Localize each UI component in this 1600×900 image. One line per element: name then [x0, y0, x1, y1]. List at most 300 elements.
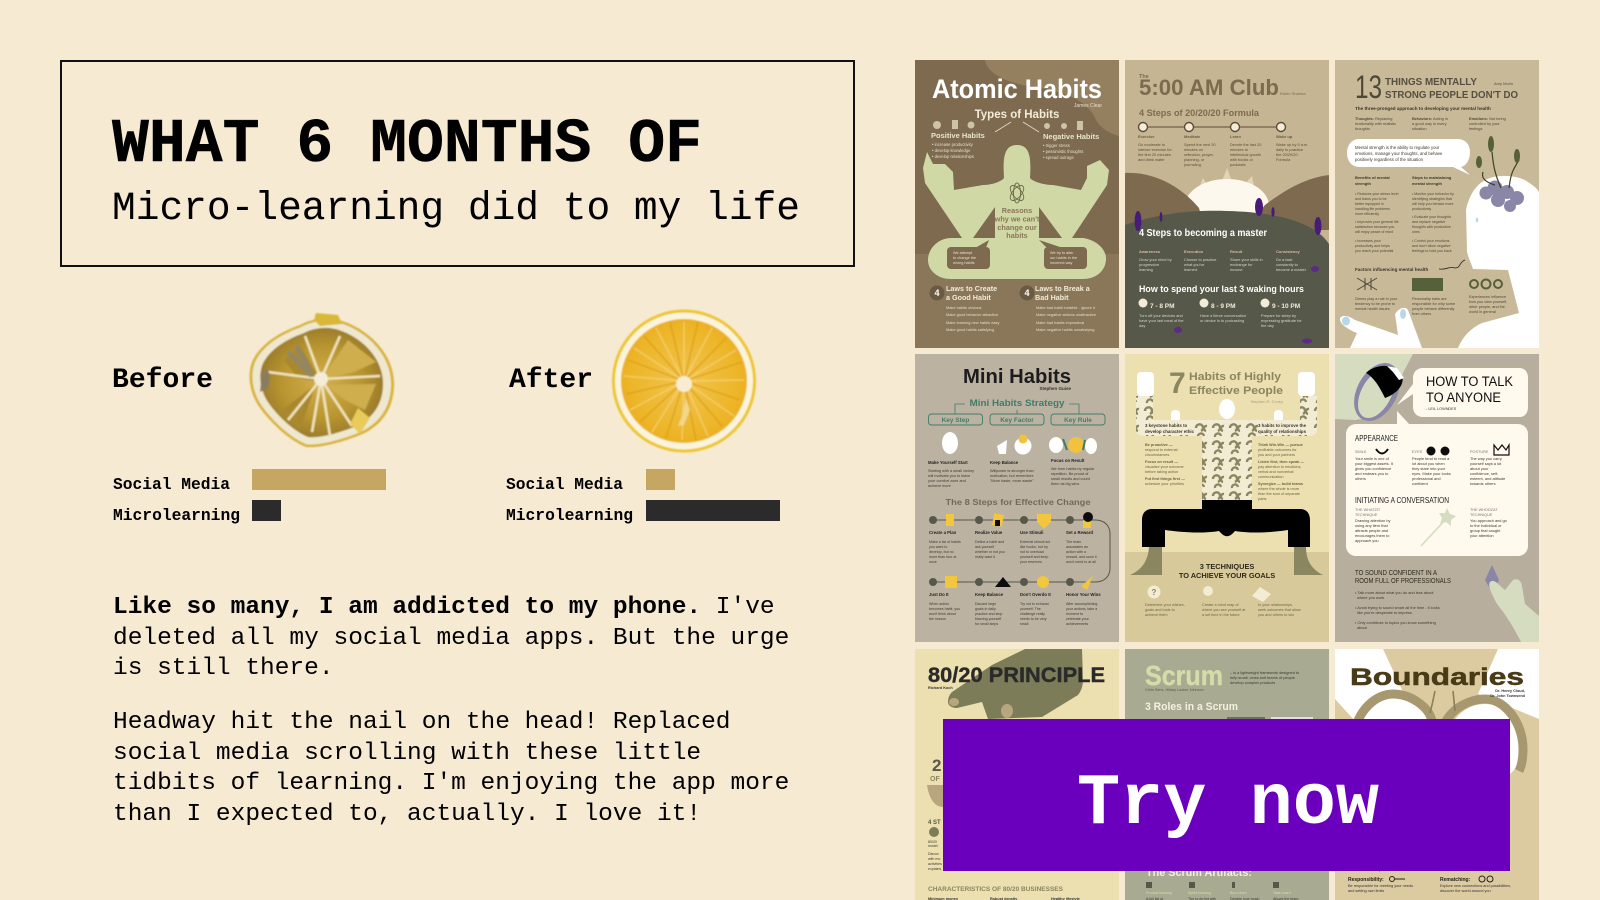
panel: book summary: Mini Habits: you want to [929, 545, 947, 549]
panel: book summary: Mini Habits: Key Step [942, 417, 969, 424]
panel: book summary: Mini Habits: Realize Value [975, 530, 1003, 535]
talking mouth icon [1345, 355, 1409, 429]
panel: book summary: Scrum: help small, close-knit teams of people [1230, 675, 1295, 680]
panel: book summary: 13 Things: thoughts [1355, 126, 1370, 131]
panel: book summary: Mini Habits: ask yourself [975, 545, 994, 549]
panel: book summary: 7 Habits: where you see yourself at [1202, 608, 1246, 612]
panel: book summary: How to Talk to Anyone [1335, 354, 1539, 642]
panel: book summary: 7 Habits: Stephen R. Covey [1251, 399, 1283, 404]
panel: book summary: 5 AM Club [1125, 60, 1329, 348]
before label: Before [112, 365, 213, 396]
panel: book summary: Scrum: The Scrum Artifacts: [1146, 867, 1252, 879]
panel: book summary: Mini Habits: for small steps [975, 622, 998, 626]
panel: book summary: 5 AM Club: what you've [1184, 262, 1204, 267]
panel: book summary: 13 Things: strength [1355, 181, 1372, 186]
panel: book summary: Atomic Habits: our habits in the [1050, 256, 1077, 260]
headline: WHAT 6 MONTHS OF [112, 109, 702, 180]
first paragraph: deleted all my social media apps. But the urge [113, 625, 789, 652]
panel: book summary: How to Talk to Anyone: TECHNIQUE [1355, 513, 1378, 517]
panel: book summary: How to Talk to Anyone: esteem, and attitude [1470, 476, 1505, 481]
panel: book summary: 5 AM Club: 4 Steps of 20/20/20 Formula [1139, 108, 1260, 118]
panel: book summary: Mini Habits: them as big wins [1051, 482, 1079, 486]
panel: book summary: 7 Habits: In your relationships, [1258, 603, 1293, 607]
panel: book summary: Mini Habits: Stephen Guise [1039, 386, 1071, 391]
panel: book summary: How to Talk to Anyone: yourself says a lot [1470, 461, 1502, 466]
panel: book summary: 13 Things: emotions, manage your thoughts, and behave [1355, 151, 1443, 156]
sunrise hills [1199, 168, 1255, 190]
panel: book summary: 13 Things: irrationality with realistic [1355, 121, 1396, 126]
panel: book summary: 13 Things: other people, and the [1469, 305, 1505, 309]
panel: book summary: 80/20 Principle: 2 [932, 756, 941, 775]
panel: book summary: Atomic Habits: Make habits obvious [946, 305, 982, 310]
panel: book summary: 7 Habits: visualize your outcome [1145, 465, 1184, 469]
panel: book summary: 7 Habits: Put first things first — [1145, 477, 1185, 481]
panel: book summary: Scrum: 3 Roles in a Scrum [1145, 701, 1238, 713]
panel: book summary: 5 AM Club: Wake up by 5 a.m. [1276, 142, 1308, 147]
panel: book summary: Mini Habits: External stimuli act [1020, 540, 1050, 544]
panel: book summary: Mini Habits: Don't Overdo It [1020, 592, 1051, 597]
panel: book summary: Mini Habits: The 8 Steps for Effective Change [946, 497, 1091, 507]
panel: book summary: 5 AM Club: Share your skills in [1230, 257, 1263, 262]
panel: book summary: Atomic Habits: Reasons [1002, 206, 1032, 215]
panel: book summary: 7 Habits: Determine your wishes, [1145, 603, 1185, 607]
panel: book summary: Boundaries: and setting own limits [1348, 889, 1384, 893]
panel: book summary: 5 AM Club: and drink water [1138, 157, 1165, 162]
panel: book summary: Mini Habits: moment to [1066, 612, 1083, 616]
panel: book summary: Atomic Habits: • pessimistic thoughts [1043, 149, 1083, 154]
panel: book summary: 80/20 Principle: Discov [928, 852, 939, 856]
panel: book summary: 5 AM Club: journaling [1183, 162, 1201, 167]
panel: book summary: 5 AM Club: minutes to [1230, 147, 1248, 152]
panel: book summary: How to Talk to Anyone: lot about you when [1412, 461, 1445, 466]
panel: book summary: How to Talk to Anyone: • Avoid trying to sound smart all the time - it looks [1355, 605, 1440, 610]
legend label: social media before: Social Media [113, 475, 230, 494]
panel: book summary: Scrum: develop complex products [1230, 680, 1275, 685]
panel: book summary: 80/20 Principle: 80/20 PRINCIPLE [928, 664, 1105, 687]
panel: book summary: 5 AM Club: How to spend your last 3 waking hours [1139, 284, 1304, 294]
panel: book summary: 13 Things: and replace negative [1412, 220, 1445, 224]
panel: book summary: 7 Habits: 3 habits to improve the [1258, 423, 1307, 428]
panel: book summary: 7 Habits: you and your partners [1258, 453, 1295, 457]
speech bubble [1347, 139, 1470, 175]
panel: book summary: 13 Things: better equipped in [1355, 202, 1384, 206]
panel: book summary: 13 Things [1335, 60, 1539, 348]
panel: book summary: How to Talk to Anyone: TECHNIQUE [1470, 513, 1493, 517]
figure [923, 145, 1109, 279]
panel: book summary: 13 Things: positively regardless of the situation [1355, 157, 1424, 162]
panel: book summary: 13 Things: responsible for why some [1412, 302, 1455, 306]
panel: book summary: 5 AM Club: the first 20 minutes [1138, 152, 1171, 157]
panel: book summary: 5 AM Club: the 20/20/20 [1276, 152, 1298, 157]
panel: book summary: 80/20 Principle: 4 ST [928, 820, 941, 826]
panel: book summary: 7 Habits: Synergize — build teams [1258, 482, 1303, 486]
panel: book summary: 13 Things: 13 [1355, 69, 1382, 105]
panel: book summary: Mini Habits: Willpower is stronger than [990, 469, 1034, 473]
panel: book summary: Atomic Habits: Negative Habits [1043, 132, 1099, 141]
panel: book summary: 5 AM Club: learned [1184, 267, 1197, 272]
panel: book summary: 5 AM Club: Have a fierce conversation [1200, 313, 1246, 318]
panel: book summary: Atomic Habits: a Good Habit [946, 293, 991, 302]
panel: book summary: Mini Habits: Keep Balance [990, 460, 1019, 465]
panel: book summary: 5 AM Club: daily to practice [1276, 147, 1303, 152]
legend label: microlearning before: Microlearning [113, 506, 240, 525]
panel: book summary: Mini Habits: Discard large [975, 602, 996, 606]
panel: book summary: 5 AM Club: planning, or [1184, 157, 1205, 162]
panel: book summary: 80/20 Principle: with mo [928, 857, 940, 861]
panel: book summary: 5 AM Club: reflection, prayer, [1184, 152, 1214, 157]
panel: book summary: 5 AM Club: Devote the last 20 [1230, 142, 1262, 147]
panel: book summary: 5 AM Club: Execution [1184, 249, 1204, 254]
panel: book summary: 5 AM Club: Meditate [1184, 134, 1201, 139]
panel: book summary: Boundaries [1335, 649, 1539, 900]
panel: book summary: 13 Things: mental strength [1412, 181, 1443, 186]
panel: book summary: Atomic Habits: • develop knowledge [932, 148, 971, 153]
panel: book summary: 7 Habits: profitable outcomes for [1258, 448, 1297, 452]
panel: book summary: Mini Habits: We form habits by regular [1051, 467, 1095, 471]
panel: book summary: Boundaries: Responsibility: [1348, 877, 1384, 883]
panel: book summary: 7 Habits: a set time in the future [1202, 613, 1240, 617]
panel: book summary: 13 Things: controlled by your [1469, 121, 1500, 126]
panel: book summary: Mini Habits: once [929, 560, 937, 564]
steps path [933, 520, 1110, 582]
first paragraph: Like so many, I am addicted to my phone. I've [113, 594, 775, 621]
panel: book summary: 13 Things: thoughts with productive [1412, 225, 1451, 229]
panel: book summary: Mini Habits: Key Rule [1064, 417, 1092, 424]
panel: book summary: Atomic Habits: change our [997, 223, 1037, 232]
panel: book summary: Mini Habits: Mini Habits Strategy [970, 398, 1065, 409]
panel: book summary: 13 Things: situation [1412, 126, 1426, 131]
panel: book summary: Mini Habits: blaming yourself [975, 617, 1001, 621]
panel: book summary: 13 Things: handling life problems [1355, 207, 1390, 211]
panel: book summary: 7 Habits: develop character ethic [1145, 429, 1195, 434]
panel: book summary: Atomic Habits: Types of Habits [975, 109, 1059, 121]
panel: book summary: 5 AM Club: with books or [1230, 157, 1254, 162]
panel: book summary: Boundaries: Boundaries [1350, 664, 1524, 691]
panel: book summary: How to Talk to Anyone: about your [1470, 466, 1489, 471]
panel: book summary: 13 Things: a good way in every [1412, 121, 1447, 126]
panel: book summary: Scrum [1125, 649, 1329, 900]
panel: book summary: How to Talk to Anyone: Drawing attention by [1355, 518, 1391, 523]
panel: book summary: Boundaries: Dr. Henry Cloud, [1495, 689, 1525, 693]
bar: social media before [252, 469, 386, 490]
panel: book summary: How to Talk to Anyone: - LEIL LOWNDES [1426, 407, 1457, 411]
panel: book summary: Mini Habits: action with a [1066, 550, 1086, 554]
panel: book summary: 5 AM Club: learning [1139, 267, 1153, 272]
panel: book summary: How to Talk to Anyone: confidence, self- [1470, 471, 1499, 476]
panel: book summary: Atomic Habits: We attempt [953, 251, 973, 255]
panel: book summary: 80/20 Principle: CHARACTERISTICS OF 80/20 BUSINESSES [928, 886, 1064, 893]
panel: book summary: 5 AM Club: progressive [1139, 262, 1159, 267]
panel: book summary: Mini Habits: The brain [1066, 540, 1081, 544]
panel: book summary: Atomic Habits: Make learning new habits easy [946, 320, 999, 325]
panel: book summary: 7 Habits: communication [1258, 475, 1284, 479]
call to action button [943, 719, 1510, 871]
panel: book summary: How to Talk to Anyone: TO ANYONE [1426, 390, 1501, 405]
panel: book summary: Atomic Habits: Atomic Habits [932, 74, 1102, 104]
panel: book summary: 13 Things: tendency to be prone to [1355, 302, 1395, 306]
panel: book summary: How to Talk to Anyone: The way you carry [1470, 456, 1502, 461]
legend label: social media after: Social Media [506, 475, 623, 494]
panel: book summary: Mini Habits: challenge really [1020, 612, 1045, 616]
panel: book summary: 13 Things: • Improves your general life [1355, 220, 1399, 224]
panel: book summary: Mini Habits: "More haste, more waste" [990, 479, 1034, 483]
panel: book summary: 13 Things: feelings to hold you back [1412, 249, 1452, 253]
panel: book summary: Atomic Habits: • develop relationships [932, 154, 974, 159]
panel: book summary: 13 Things: how you view yourself, [1469, 300, 1507, 304]
panel: book summary: 13 Things: satisfaction because you [1355, 225, 1394, 229]
panel: book summary: How to Talk to Anyone: SMILE [1355, 450, 1367, 454]
panel: book summary: 13 Things: Mental strength is the ability to regulate your [1355, 145, 1440, 150]
panel: book summary: 7 Habits: respond to external [1145, 448, 1178, 452]
bar: social media after [646, 469, 675, 490]
second paragraph: tidbits of learning. I'm enjoying the app more [113, 770, 789, 797]
panel: book summary: How to Talk to Anyone: approach you [1355, 538, 1379, 543]
icon: fresh lemon [612, 310, 756, 452]
panel: book summary: Mini Habits: Keep Balance [975, 592, 1004, 597]
panel: book summary: 5 AM Club: 5:00 AM Club [1139, 75, 1279, 100]
panel: book summary: 13 Things: Thoughts: Replacing [1355, 116, 1392, 121]
panel: book summary: 13 Things: Personality traits are [1412, 297, 1447, 301]
panel: book summary: 80/20 Principle: model [928, 844, 938, 848]
panel: book summary: 13 Things: The three-pronged approach to developing your mental health [1355, 106, 1491, 111]
white content panel [1346, 424, 1528, 556]
panel: book summary: Boundaries: Dr. John Townsend [1490, 694, 1526, 698]
panel: book summary: 7 Habits: Effective People [1189, 385, 1283, 397]
panel: book summary: 13 Things: world in general [1469, 310, 1496, 314]
panel: book summary: Mini Habits: After accomplishing [1066, 602, 1097, 606]
panel: book summary: 5 AM Club: the day [1261, 323, 1274, 328]
panel: book summary: Mini Habits: needs to be very [1020, 617, 1047, 621]
panel: book summary: Atomic Habits: Make bad habits impractical [1036, 320, 1084, 325]
panel: book summary: 7 Habits: circumstances [1145, 453, 1169, 457]
panel: book summary: 7 Habits: parts [1258, 497, 1267, 501]
panel: book summary: 5 AM Club: have your last meal of the [1139, 318, 1184, 323]
panel: book summary: 5 AM Club: Exercise [1138, 134, 1155, 139]
panel: book summary: Mini Habits: the reason [929, 617, 946, 621]
panel: book summary: 5 AM Club: Grow your mind by [1139, 257, 1172, 262]
panel: book summary: 13 Things: • Control your emotions [1412, 239, 1450, 243]
panel: book summary: 13 Things: • Reduces your stress level [1355, 192, 1399, 196]
panel: book summary: Atomic Habits: Make negative actions unattractive [1036, 312, 1096, 317]
panel: book summary: 80/20 Principle: OF [930, 776, 940, 783]
panel: book summary: How to Talk to Anyone: INITIATING A CONVERSATION [1355, 496, 1449, 505]
panel: book summary: Mini Habits: Honor Your Wins [1066, 592, 1101, 597]
panel: book summary: Mini Habits: won't need to at all [1066, 560, 1096, 564]
panel: book summary: Atomic Habits: Laws to Create [946, 284, 997, 293]
atom icon [1008, 183, 1026, 203]
panel: book summary: Atomic Habits: Make negative habits unsatisfying [1036, 327, 1094, 332]
panel: book summary: Mini Habits: Starting with a small victory [928, 469, 974, 473]
after panel [506, 310, 780, 525]
panel: book summary: How to Talk to Anyone: where you work [1357, 595, 1384, 600]
panel: book summary: Boundaries: Explore new connections and possibilities, [1440, 884, 1511, 888]
panel: book summary: Mini Habits: Use Stimuli [1020, 530, 1043, 535]
panel: book summary: 7 Habits: 3 keystone habits to [1145, 423, 1188, 428]
panel: book summary: Mini Habits: Mini Habits [963, 366, 1071, 388]
panel: book summary: 5 AM Club: 9 - 10 PM [1272, 303, 1300, 310]
panel: book summary: Mini Habits: not to overload [1020, 550, 1044, 554]
patterned body [1136, 396, 1317, 502]
panel: book summary: How to Talk to Anyone: to the individual or [1470, 523, 1502, 528]
brain [1480, 180, 1524, 212]
panel: book summary: 7 Habits: before taking action [1145, 470, 1178, 474]
panel: book summary: How to Talk to Anyone: gives you confidence [1355, 466, 1391, 471]
panel: book summary: Atomic Habits: Laws to Break a [1035, 284, 1091, 293]
panel: book summary: Boundaries: discover the world around you [1440, 889, 1491, 893]
panel: book summary: How to Talk to Anyone: using any item that [1355, 523, 1389, 528]
panel: book summary: 5 AM Club: Go moderate to [1138, 142, 1165, 147]
panel: book summary: 7 Habits: schedule your priorities [1145, 482, 1184, 486]
panel: book summary: How to Talk to Anyone: You approach and go [1470, 518, 1507, 523]
panel: book summary: Mini Habits: Just Do It [929, 592, 949, 597]
panel: book summary: 5 AM Club: intellectual growth [1230, 152, 1261, 157]
panel: book summary: 5 AM Club: intense exercise for [1138, 147, 1172, 152]
panel: book summary: How to Talk to Anyone: HOW TO TALK [1426, 374, 1513, 389]
panel: book summary: 13 Things: and trains you to be [1355, 197, 1387, 201]
panel: book summary: 5 AM Club: Robin Sharma [1280, 91, 1306, 96]
panel: book summary: 13 Things: mental health issues [1355, 307, 1390, 311]
panel: book summary: 7 Habits: goals and tools to [1145, 608, 1175, 612]
panel: book summary: Boundaries: Rematching: [1440, 877, 1471, 883]
panel: book summary: How to Talk to Anyone: towards others [1470, 481, 1496, 486]
panel: book summary: Mini Habits: will motivate you to leave [928, 474, 970, 478]
panel: book summary: Atomic Habits: • trigger stress [1043, 143, 1070, 148]
panel: book summary: Mini Habits: Set a Reward [1066, 530, 1093, 535]
panel: book summary: 5 AM Club: minutes on [1184, 147, 1203, 152]
black trousers [1142, 500, 1310, 547]
panel: book summary: 13 Things: ones [1412, 230, 1420, 234]
panel: book summary: 13 Things: identifying strategies that [1412, 197, 1452, 201]
panel: book summary: 5 AM Club: podcasts [1230, 162, 1246, 167]
panel: book summary: Atomic Habits: • spread outrage [1043, 155, 1074, 160]
panel: book summary: 13 Things: Factors influencing mental health [1355, 267, 1428, 272]
handcuffs [1355, 695, 1431, 783]
panel: book summary: 7 Habits: than the sum of separate [1258, 492, 1300, 496]
panel: book summary: 5 AM Club: become a master [1276, 267, 1307, 272]
panel: book summary: 80/20 Principle: explains [928, 867, 941, 871]
panel: book summary: 7 Habits: Create a mind map of [1202, 603, 1239, 607]
button label: Try now [1077, 763, 1379, 845]
panel: book summary: How to Talk to Anyone: THE WHATZIT [1355, 508, 1381, 512]
panel: book summary: 13 Things: you reach your potential [1355, 249, 1394, 253]
panel: book summary: 5 AM Club: Result [1230, 249, 1243, 254]
panel: book summary: Atomic Habits: James Clear [1074, 103, 1102, 109]
panel: book summary: How to Talk to Anyone: group that caught [1470, 528, 1501, 533]
panel: book summary: 13 Things: Emotions: Not being [1469, 116, 1506, 121]
panel: book summary: 7 Habits: quality of relationships [1258, 429, 1307, 434]
panel: book summary: 13 Things: • Increases your [1355, 239, 1382, 243]
panel: book summary: Mini Habits: goals in daily [975, 607, 996, 611]
panel: book summary: 13 Things: more efficiently [1355, 212, 1379, 216]
panel: book summary: Mini Habits: your reserves [1020, 560, 1042, 564]
panel: book summary: 13 Things: Behaviors: Acting in [1412, 116, 1448, 121]
panel: book summary: Boundaries: occasional need for autonomy [1440, 868, 1491, 872]
second paragraph: than I expected to, actually. I love it! [113, 801, 701, 828]
after label: After [509, 365, 593, 396]
panel: book summary: Mini Habits: your comfort zone and [928, 479, 966, 483]
panel: book summary: 80/20 Principle: activities [928, 862, 942, 866]
panel: book summary: 5 AM Club: Formula [1276, 157, 1291, 162]
panel: book summary: Mini Habits: like hooks, but try [1020, 545, 1048, 549]
panel: book summary: Atomic Habits: incorrect way [1050, 261, 1072, 265]
panel: book summary: How to Talk to Anyone: like you're desperate to impress [1357, 610, 1412, 615]
before panel [112, 313, 394, 525]
panel: book summary: How to Talk to Anyone: and endears you to [1355, 471, 1388, 476]
panel: book summary: 5 AM Club: Prepare for sleep by [1261, 313, 1296, 318]
panel: book summary: Scrum: – is a lightweight framework designed to [1230, 670, 1299, 675]
panel: book summary: 13 Things: people behave differently [1412, 307, 1454, 311]
panel: book summary: Boundaries: Be responsible for meeting your needs [1348, 884, 1413, 888]
panel: book summary: Scrum: Burn chart [1230, 891, 1247, 895]
panel: book summary: 80/20 Principle: Richard Koch [928, 686, 953, 690]
panel: book summary: Atomic Habits: We try to alter [1050, 251, 1074, 255]
panel: book summary: 13 Things: productively [1412, 207, 1431, 211]
panel: book summary: Atomic Habits: 4 [934, 288, 940, 298]
head silhouette [1458, 176, 1539, 348]
subtitle: Micro-learning did to my life [112, 187, 800, 232]
panel: book summary: 5 AM Club: constantly to [1276, 262, 1298, 267]
panel: book summary: Atomic Habits: Make good habits satisfying [946, 327, 994, 332]
bar: microlearning before [252, 500, 281, 521]
second paragraph: social media scrolling with these little [113, 740, 701, 767]
title box [61, 61, 854, 266]
panel: book summary: How to Talk to Anyone: attracts people and [1355, 528, 1388, 533]
icon: dried lemon [250, 313, 394, 447]
panel: book summary: Scrum: Chris Sims, Hillary Louise Johnson [1145, 688, 1204, 692]
panel: book summary: Mini Habits: Define a habit and [975, 540, 1004, 544]
panel: book summary: How to Talk to Anyone: THE WHODZAT [1470, 508, 1498, 512]
panel: book summary: 7 Habits: you and others to win [1258, 613, 1294, 617]
panel: book summary: Mini Habits: Create a Plan [929, 530, 957, 535]
panel: book summary: 7 Habits: verbal and nonverbal [1258, 470, 1294, 474]
panel: book summary: 5 AM Club: Consistency [1276, 249, 1301, 254]
panel: book summary: 13 Things: feelings [1469, 126, 1482, 131]
panel: book summary: Atomic Habits: Make good behavior attractive [946, 312, 998, 317]
panel: book summary: How to Talk to Anyone: about [1357, 625, 1368, 630]
panel: book summary: Mini Habits: won't think about [929, 612, 956, 616]
panel: book summary: 13 Things: • Evaluate your thoughts [1412, 215, 1451, 219]
panel: book summary: How to Talk to Anyone: professional and [1412, 476, 1441, 481]
panel: book summary: 13 Things: productivity and helps [1355, 244, 1390, 248]
panel: book summary: How to Talk to Anyone: eyes. Make your looks [1412, 471, 1451, 476]
panel: book summary: How to Talk to Anyone: others [1355, 476, 1366, 481]
panel: book summary: Mini Habits: Try not to exhaust [1020, 602, 1049, 606]
panel: book summary: Mini Habits: yourself and keep [1020, 555, 1048, 559]
panel: book summary: 80/20 Principle: 80/20 [928, 840, 937, 844]
panel: book summary: How to Talk to Anyone: POSTURE [1470, 450, 1489, 454]
panel: book summary: 5 AM Club: Wake up [1276, 134, 1293, 139]
panel: book summary: 13 Things: STRONG PEOPLE DON'T DO [1385, 90, 1518, 101]
panel: book summary: Mini Habits: becomes habit, you [929, 607, 960, 611]
panel: book summary: 5 AM Club: 4 Steps to becoming a master [1139, 228, 1267, 239]
panel: book summary: How to Talk to Anyone: APPEARANCE [1355, 434, 1398, 443]
panel: book summary: Atomic Habits [915, 60, 1119, 348]
panel: book summary: 80/20 Principle [915, 649, 1119, 900]
panel: book summary: Mini Habits: practice and stop [975, 612, 1002, 616]
panel: book summary: 5 AM Club: 8 - 9 PM [1211, 303, 1236, 310]
panel: book summary: 13 Things: from others [1412, 312, 1431, 316]
panel: book summary: How to Talk to Anyone: ROOM FULL OF PROFESSIONALS [1355, 576, 1451, 585]
panel: book summary: Atomic Habits: 4 [1024, 288, 1030, 298]
panel: book summary: 7 Habits [1125, 354, 1329, 642]
panel: book summary: Scrum: Scrum [1145, 660, 1223, 691]
panel: book summary: How to Talk to Anyone: EYES [1412, 450, 1423, 454]
panel: book summary: Boundaries: encounters and expectation [1348, 868, 1395, 872]
panel: book summary: How to Talk to Anyone: confident [1412, 481, 1429, 486]
panel: book summary: Atomic Habits: Make bad habit invisible - ignore it [1036, 305, 1096, 310]
panel: book summary: 7 Habits: TO ACHIEVE YOUR GOALS [1179, 571, 1275, 580]
panel: book summary: 5 AM Club: income [1230, 267, 1243, 272]
